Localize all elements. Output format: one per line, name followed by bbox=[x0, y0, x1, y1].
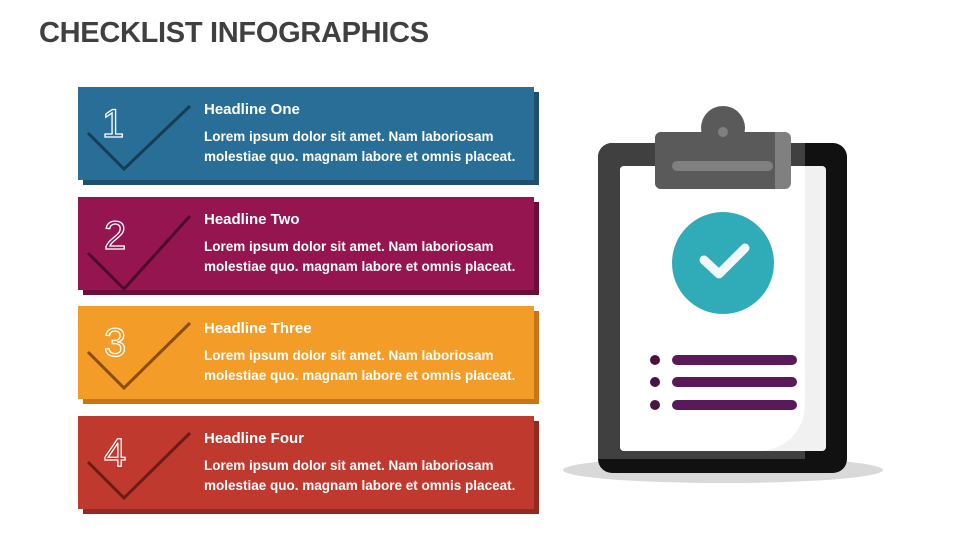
icon: check 1 bbox=[87, 102, 191, 171]
icon: check 3 bbox=[87, 321, 191, 390]
icon: check 1: 1 bbox=[102, 102, 124, 146]
panel: two: Headline Two bbox=[204, 211, 300, 228]
icon: check 3: 3 bbox=[104, 321, 126, 365]
panel: two: Lorem ipsum dolor sit amet. Nam laboriosam bbox=[204, 239, 494, 254]
panel: one bbox=[78, 87, 539, 185]
panel: three: Headline Three bbox=[204, 320, 312, 337]
panel: three: molestiae quo. magnam labore et omnis placeat. bbox=[204, 368, 515, 382]
icon: check 4 bbox=[87, 431, 191, 500]
panel: one: Headline One bbox=[204, 101, 300, 118]
icon: check 4: 4 bbox=[104, 431, 126, 475]
title: CHECKLIST INFOGRAPHICS bbox=[39, 17, 429, 49]
icon: check 2 bbox=[87, 214, 191, 290]
panel: four: Lorem ipsum dolor sit amet. Nam laboriosam bbox=[204, 458, 494, 473]
panel: four: molestiae quo. magnam labore et omnis placeat. bbox=[204, 478, 515, 492]
panel: four bbox=[78, 416, 539, 514]
panel: three: Lorem ipsum dolor sit amet. Nam laboriosam bbox=[204, 348, 494, 363]
icon: check 2: 2 bbox=[104, 214, 126, 258]
panel: one: molestiae quo. magnam labore et omnis placeat. bbox=[204, 148, 515, 164]
panel: one: Lorem ipsum dolor sit amet. Nam laboriosam bbox=[204, 129, 494, 144]
panel: three bbox=[78, 306, 539, 404]
panel: four: Headline Four bbox=[204, 430, 304, 447]
panel: two: molestiae quo. magnam labore et omnis placeat. bbox=[204, 258, 515, 274]
panel: two bbox=[78, 197, 539, 295]
